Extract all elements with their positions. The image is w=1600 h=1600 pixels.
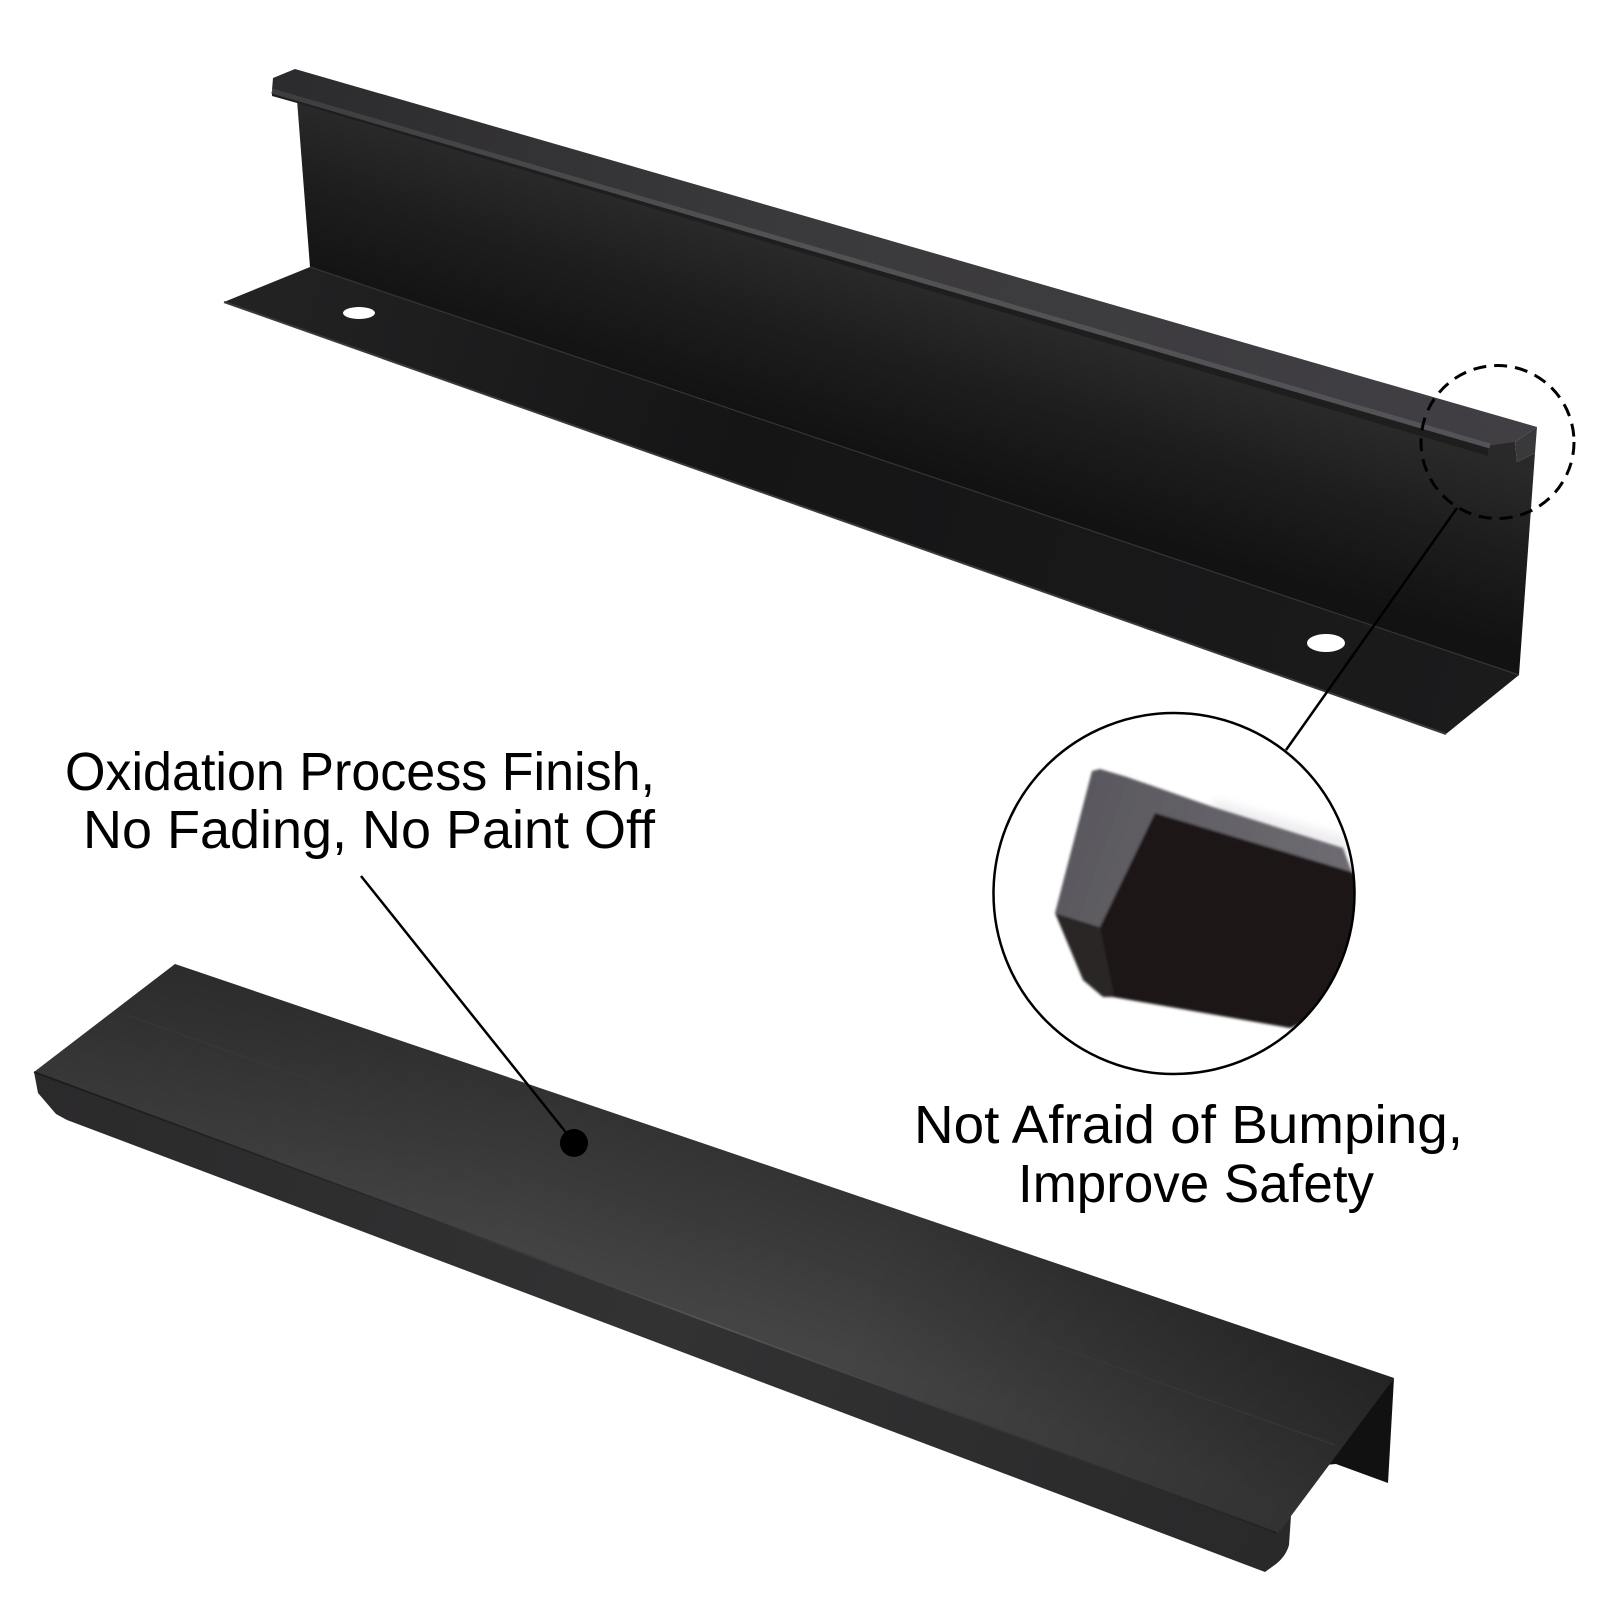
dashed detail circle — [1421, 366, 1574, 518]
end face grey — [1055, 769, 1352, 927]
mounting holes — [343, 307, 375, 319]
pale highlight — [1214, 801, 1348, 852]
callout text: finish: Oxidation Process Finish, — [65, 742, 655, 802]
panel: upper handle profile — [224, 69, 1537, 734]
zoom circle: end detail — [994, 713, 1380, 1074]
chamfer — [1055, 913, 1120, 997]
callout text: finish: No Fading, No Paint Off — [83, 800, 656, 860]
bottom flange — [224, 267, 1519, 734]
panel: lower handle — [34, 964, 1394, 1572]
callout text: bumping: Not Afraid of Bumping, — [914, 1095, 1463, 1155]
callout text: finish — [65, 742, 656, 860]
dark body — [1100, 813, 1380, 1028]
callout text: bumping — [914, 1095, 1463, 1214]
rear underside — [1325, 1378, 1394, 1483]
web face — [297, 100, 1535, 675]
callout text: bumping: Improve Safety — [1018, 1154, 1374, 1214]
front lip — [34, 1072, 1291, 1572]
pointer line and dot — [361, 876, 588, 1157]
top surface — [34, 964, 1394, 1533]
connector line to zoom circle — [1286, 508, 1457, 750]
top lip — [272, 69, 1537, 445]
